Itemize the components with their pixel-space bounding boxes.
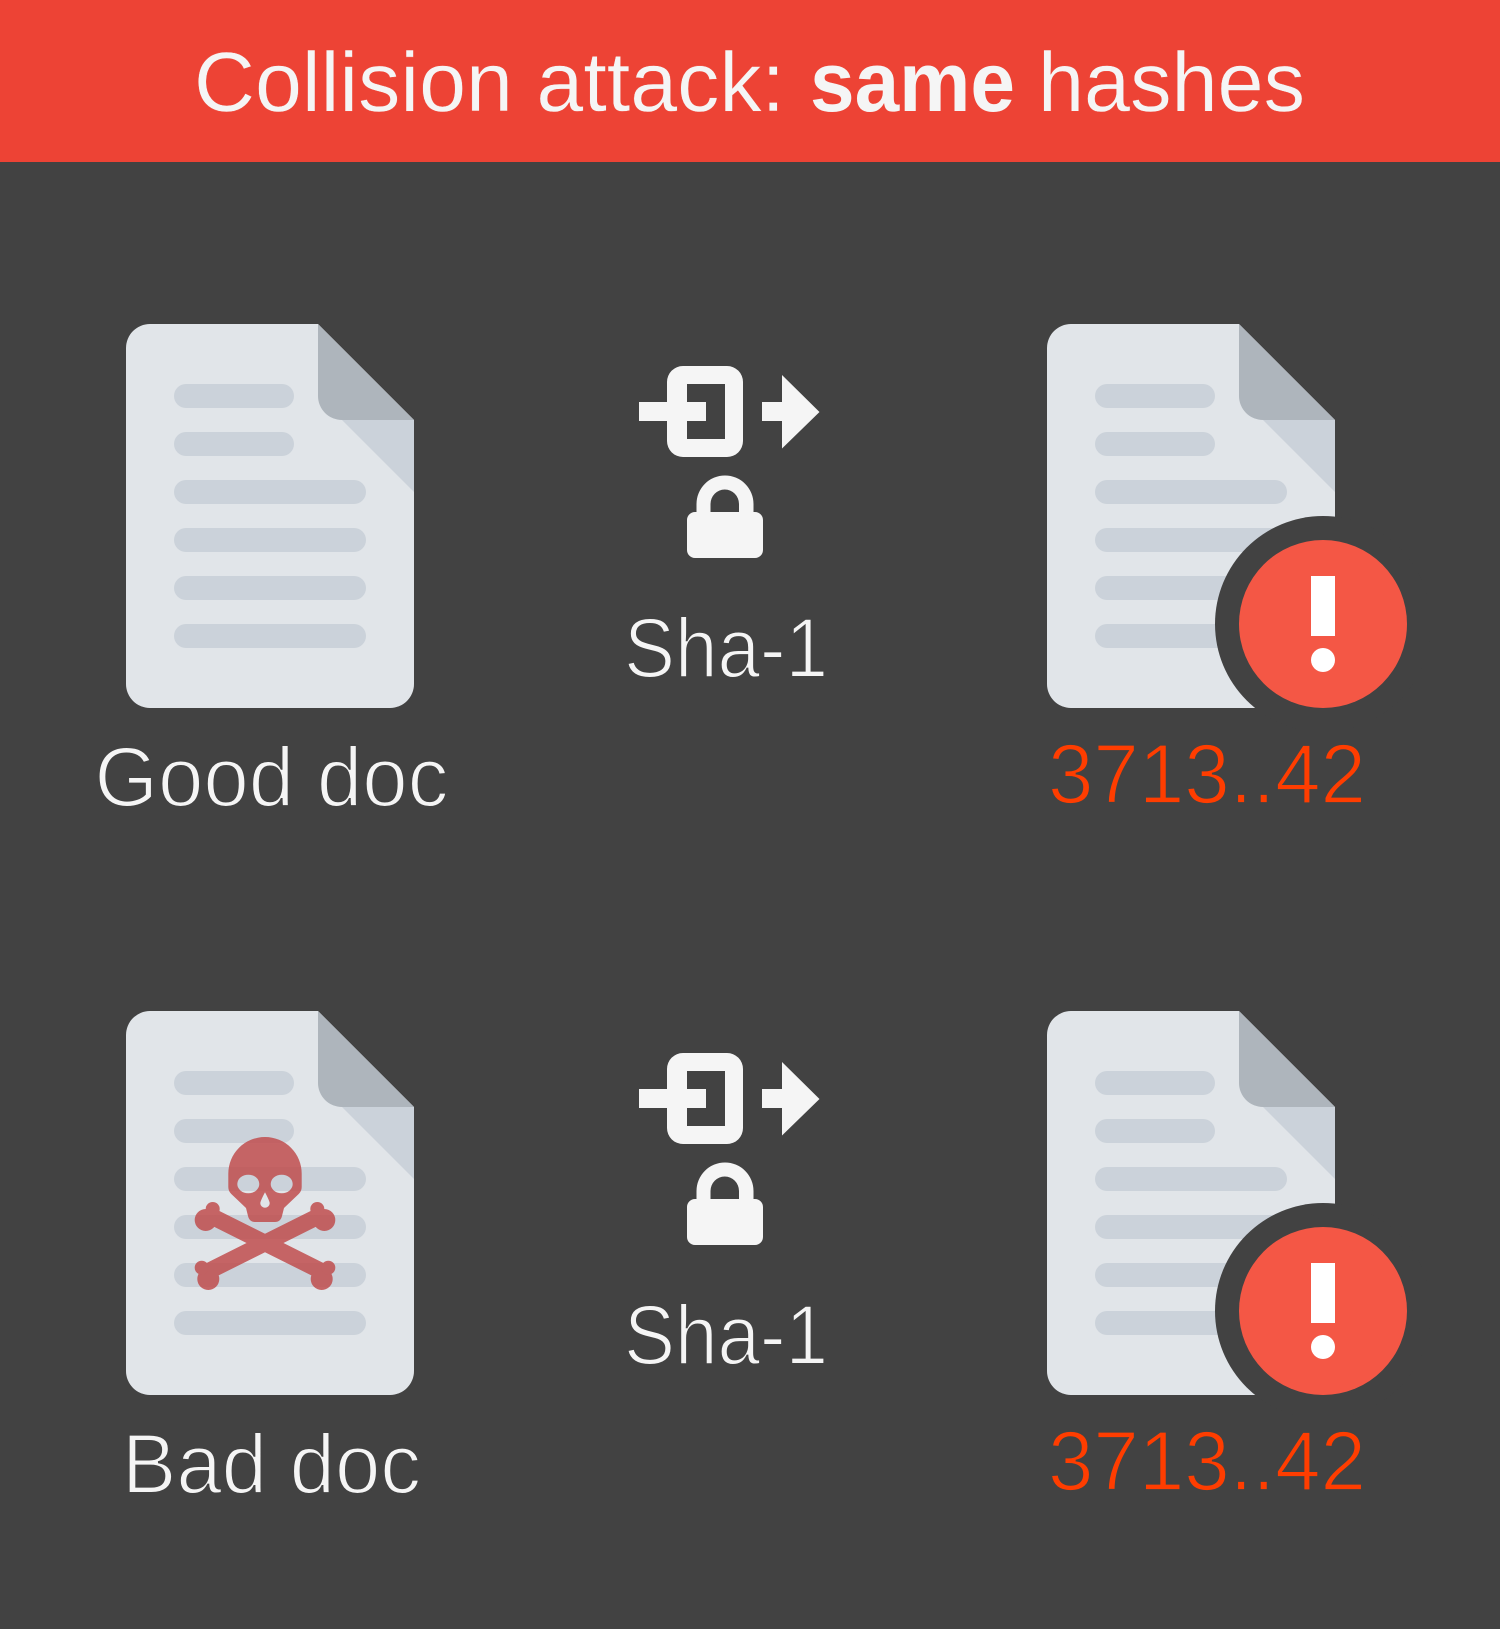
icon: result document: [1047, 1011, 1335, 1395]
icon: warning badge: [1215, 1203, 1431, 1419]
icon: result document: [1047, 324, 1335, 708]
icon: skull and crossbones: [195, 1137, 335, 1290]
label: bad doc: Bad doc: [122, 1417, 421, 1511]
label: sha-1: Sha-1: [624, 601, 828, 695]
icon: warning badge: [1215, 516, 1431, 732]
icon: hash input and output arrow: [639, 1053, 820, 1144]
icon: hash input and output arrow: [639, 366, 820, 457]
panel: bad document, bottom left: [122, 1011, 421, 1511]
panel: second hash result, bottom right: [1047, 1011, 1431, 1508]
panel: sha-1 process, top: [624, 366, 828, 695]
title text: hashes: [1038, 35, 1305, 129]
label: hash value: 3713..42: [1048, 727, 1366, 821]
title text: [194, 35, 1305, 129]
label: hash value: 3713..42: [1048, 1414, 1366, 1508]
icon: bad document: [126, 1011, 414, 1395]
label: sha-1: Sha-1: [624, 1288, 828, 1382]
panel: sha-1 process, bottom: [624, 1053, 828, 1382]
icon: good document: [126, 324, 414, 708]
icon: lock: [687, 475, 763, 558]
title text: Collision attack:: [194, 35, 785, 129]
title banner: [0, 0, 1500, 162]
panel: good document, top left: [94, 324, 448, 824]
icon: lock: [687, 1162, 763, 1245]
label: good doc: Good doc: [94, 730, 448, 824]
title text: same: [810, 35, 1015, 129]
panel: first hash result, top right: [1047, 324, 1431, 821]
